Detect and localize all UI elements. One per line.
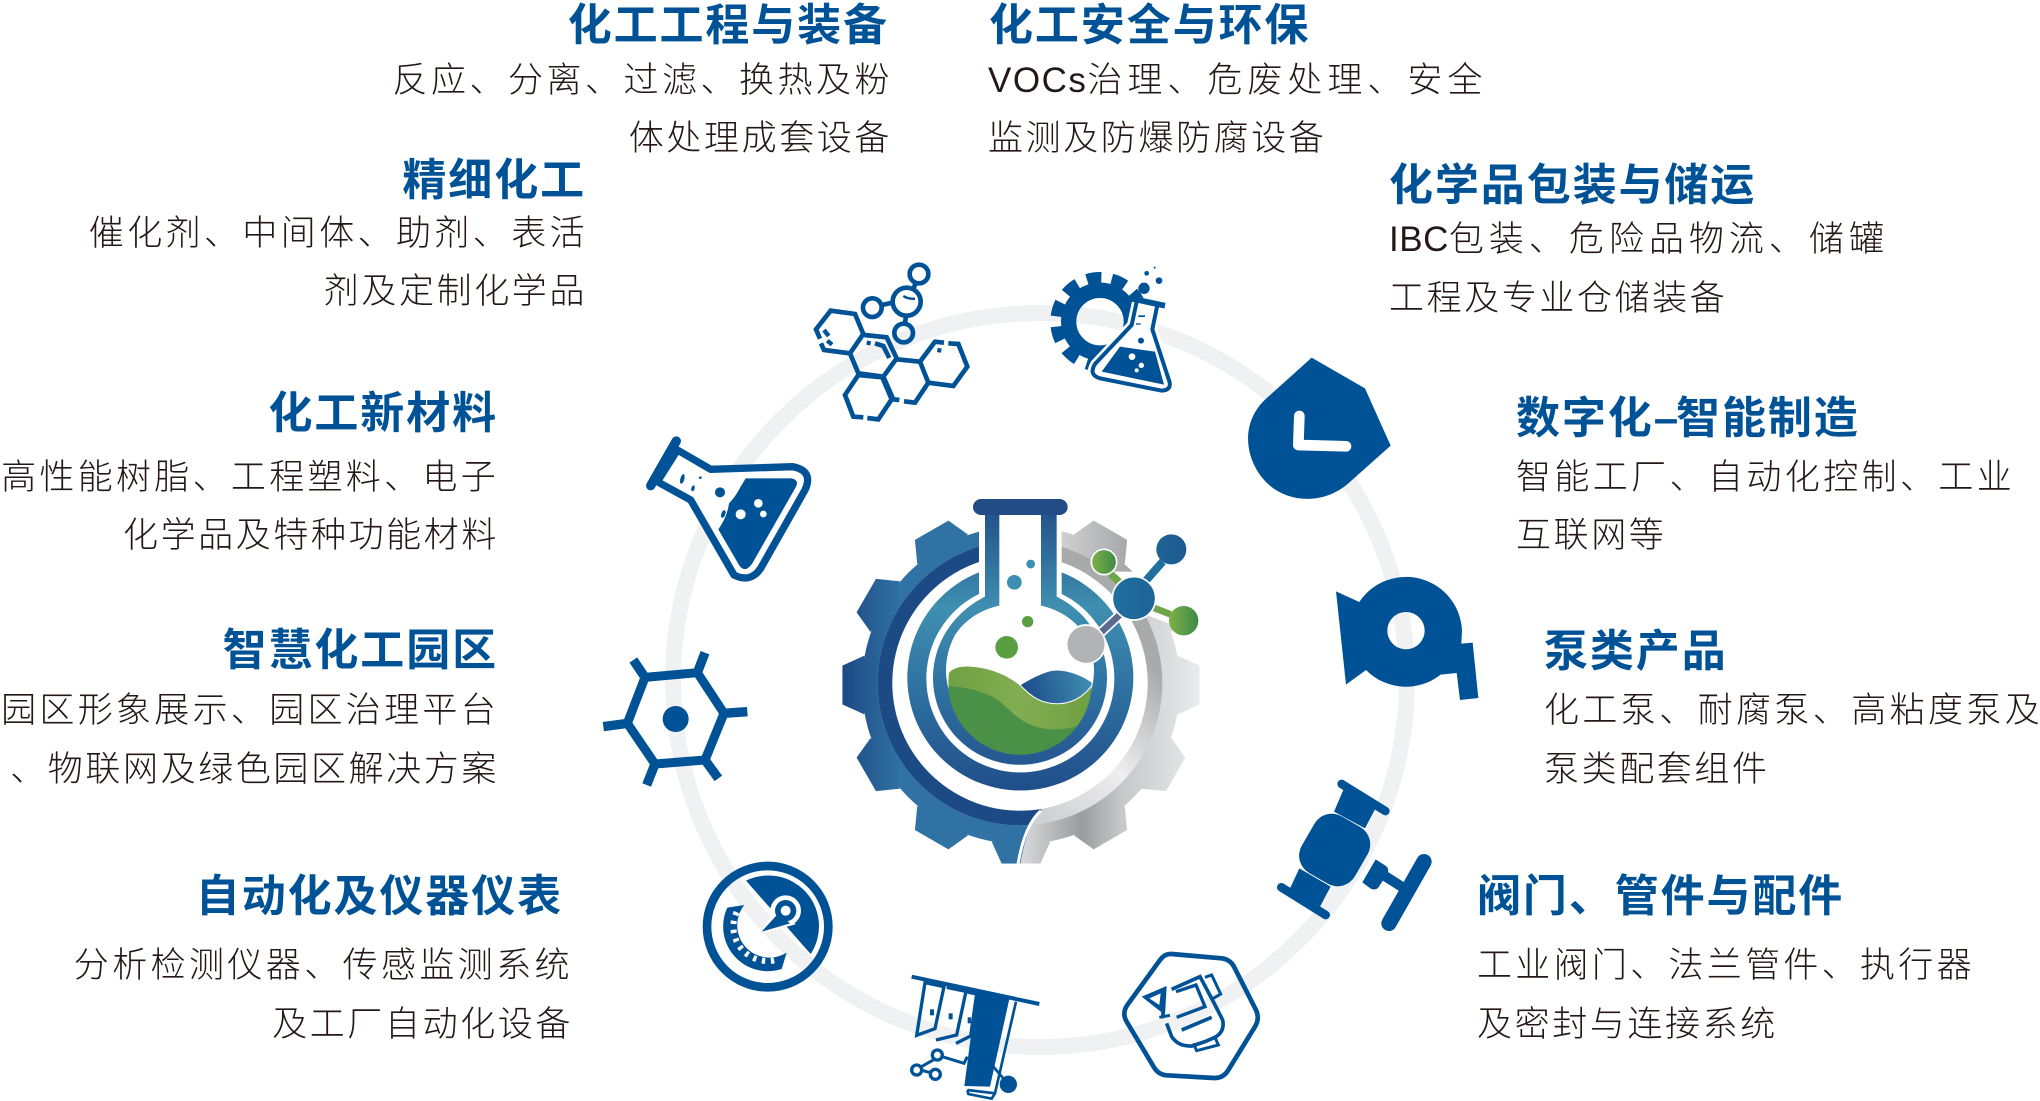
text block line 2: 监测及防爆防腐设备 (988, 119, 1326, 158)
icon: hexagon molecule (816, 265, 967, 419)
text block line 2: 及密封与连接系统 (1477, 1005, 1778, 1044)
icon: pump (1336, 577, 1478, 700)
text block line 2: 泵类配套组件 (1544, 750, 1770, 789)
panel: 化工工程与装备 (392, 1, 893, 158)
bubbles (995, 560, 1035, 659)
icon: digital shield clock (1248, 358, 1391, 499)
panel: 阀门、管件与配件 (1477, 872, 1975, 1044)
flask body (933, 515, 1107, 765)
text block: 工业阀门、法兰管件、执行器 (1477, 946, 1975, 985)
heading: 化学品包装与储运 (1389, 161, 1756, 210)
heading: 精细化工 (402, 156, 586, 205)
panel: 化学品包装与储运 (1389, 161, 1889, 318)
icon: distillation column (912, 977, 1039, 1099)
orbit ring (673, 313, 1407, 1047)
icon: hexagon node (603, 653, 747, 785)
heading: 阀门、管件与配件 (1477, 872, 1844, 921)
central logo: gear and flask (842, 499, 1200, 864)
flask outer band (907, 572, 1133, 790)
panel: 泵类产品 (1544, 627, 2040, 789)
heading: 智慧化工园区 (223, 626, 498, 675)
text block line 2: 工程及专业仓储装备 (1389, 279, 1727, 318)
text block: 反应、分离、过滤、换热及粉 (392, 61, 893, 100)
text block: IBC包装、危险品物流、储罐 (1389, 220, 1889, 259)
heading: 自动化及仪器仪表 (196, 872, 563, 921)
text block line 2: 体处理成套设备 (629, 119, 892, 158)
icon: hexagon instrument (1124, 954, 1258, 1078)
panel: 化工安全与环保 (988, 1, 1487, 158)
icon: conical flask (651, 441, 808, 578)
panel: 自动化及仪器仪表 (74, 872, 573, 1044)
text block line 2: 及工厂自动化设备 (272, 1005, 573, 1044)
text block: 高性能树脂、工程塑料、电子 (1, 458, 499, 497)
panel: 数字化-智能制造 (1516, 394, 2015, 555)
panel: 精细化工 (89, 156, 588, 311)
heading: 数字化–智能制造 (1516, 394, 1860, 443)
heading: 化工安全与环保 (989, 1, 1310, 50)
panel: 智慧化工园区 (1, 626, 499, 789)
text block: VOCs治理、危废处理、安全 (988, 61, 1487, 100)
text block: 园区形象展示、园区治理平台 (1, 691, 499, 730)
heading: 泵类产品 (1544, 627, 1728, 676)
heading: 化工工程与装备 (568, 1, 889, 50)
gear body (842, 520, 1200, 864)
text block line 2: 互联网等 (1516, 516, 1666, 555)
liquid waves (948, 666, 1092, 755)
text block line 2: 剂及定制化学品 (324, 272, 587, 311)
flask opening gap (892, 555, 1148, 811)
text block: 催化剂、中间体、助剂、表活 (89, 214, 588, 253)
text block: 化工泵、耐腐泵、高粘度泵及 (1544, 691, 2040, 730)
text block: 智能工厂、自动化控制、工业 (1516, 458, 2015, 497)
text block: 分析检测仪器、传感监测系统 (74, 946, 573, 985)
flask lip (973, 499, 1068, 515)
icon: gear with flask (1056, 267, 1170, 391)
icon: pressure gauge (707, 866, 828, 987)
heading: 化工新材料 (268, 389, 498, 438)
panel: 化工新材料 (1, 389, 499, 555)
molecule (1067, 534, 1198, 664)
icon: valve (1281, 784, 1424, 923)
text block line 2: 化学品及特种功能材料 (123, 516, 499, 555)
text block line 2: 、物联网及绿色园区解决方案 (10, 750, 499, 789)
